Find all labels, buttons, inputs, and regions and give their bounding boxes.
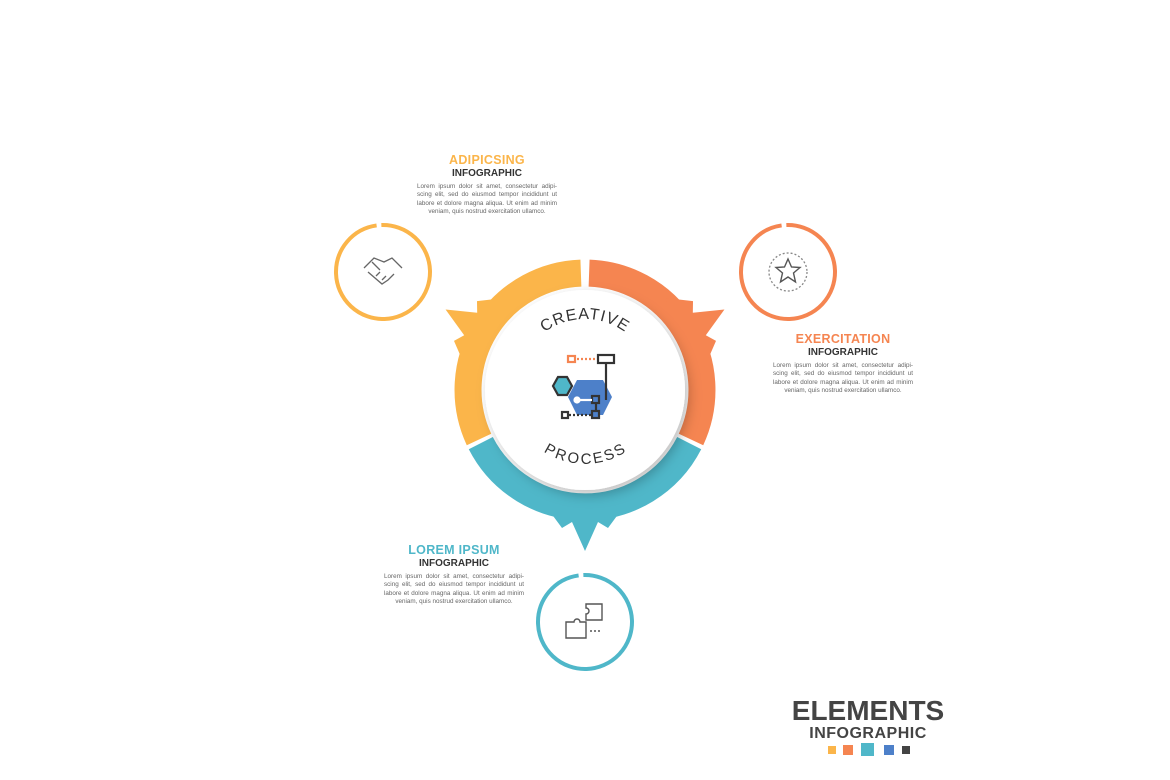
center label: CREATIVE bbox=[541, 308, 630, 332]
icon circle: blue puzzle bbox=[536, 573, 634, 671]
logo: INFOGRAPHIC bbox=[809, 725, 927, 742]
text block: lorem ipsum: LOREM IPSUM bbox=[408, 543, 500, 557]
text block: adipicsing bbox=[417, 153, 557, 215]
logo bbox=[792, 695, 944, 742]
text block: lorem ipsum: INFOGRAPHIC bbox=[419, 558, 489, 569]
text block: exercitation: Lorem ipsum dolor sit amet, consectetur adipi-scing elit, sed do eiusmod tempor incididunt ut labore et dolore magna aliqua. Ut enim ad minim veniam, quis nostrud exercitation ullamco. bbox=[773, 362, 913, 394]
text block: exercitation: INFOGRAPHIC bbox=[808, 347, 878, 358]
ring segment: yellow bbox=[426, 273, 581, 440]
text block: adipicsing: Lorem ipsum dolor sit amet, consectetur adipi-scing elit, sed do eiusmod tempor incididunt ut labore et dolore magna aliqua. Ut enim ad minim veniam, quis nostrud exercitation ullamco. bbox=[417, 183, 557, 215]
legend squares bbox=[828, 743, 910, 756]
text block: lorem ipsum bbox=[384, 543, 524, 605]
text block: adipicsing: INFOGRAPHIC bbox=[452, 168, 522, 179]
icon: process bbox=[553, 355, 614, 418]
logo: ELEMENTS bbox=[792, 695, 944, 726]
text block: exercitation: EXERCITATION bbox=[796, 332, 890, 346]
center white circle bbox=[482, 288, 696, 500]
ring segment: blue bbox=[481, 443, 689, 551]
ring segment: orange bbox=[589, 273, 744, 440]
text block: adipicsing: ADIPICSING bbox=[449, 153, 525, 167]
center white circle: PROCESS bbox=[544, 443, 624, 464]
text block: lorem ipsum: Lorem ipsum dolor sit amet, consectetur adipi-scing elit, sed do eiusmod tempor incididunt ut labore et dolore magna aliqua. Ut enim ad minim veniam, quis nostrud exercitation ullamco. bbox=[384, 573, 524, 605]
icon circle: yellow handshake bbox=[334, 223, 432, 321]
text block: exercitation bbox=[773, 332, 913, 394]
icon circle: orange star bbox=[739, 223, 837, 321]
